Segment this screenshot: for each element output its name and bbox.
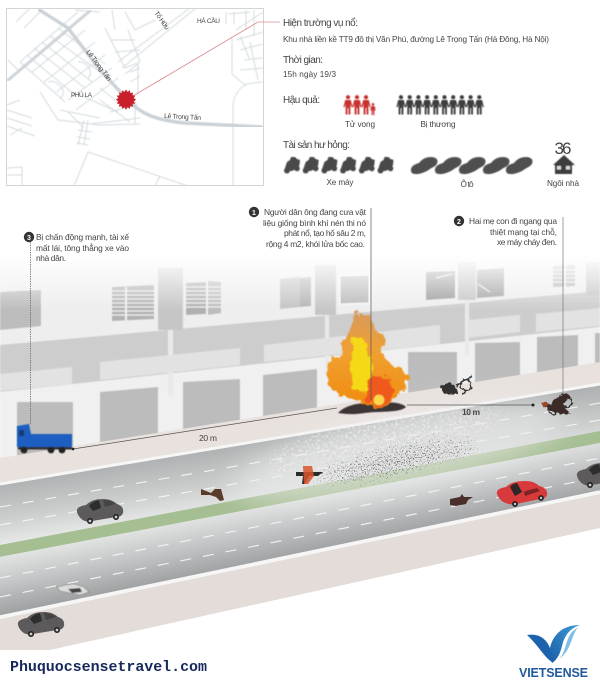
icon: house bbox=[553, 155, 575, 174]
upper windows bbox=[0, 290, 41, 330]
label: houses: Ngôi nhà bbox=[547, 179, 579, 188]
callout 3: 3 bbox=[27, 235, 31, 242]
icon group: cars bbox=[411, 157, 533, 174]
callout 3: Bị chấn động mạnh, tài xế bbox=[36, 232, 129, 242]
car: red sedan bbox=[497, 481, 547, 507]
icon group: deaths bbox=[343, 95, 376, 115]
car: dark sedan upper road bbox=[77, 499, 123, 524]
callout 3: mất lái, tông thẳng xe vào bbox=[36, 242, 129, 253]
callout 3: nhà dân. bbox=[36, 253, 66, 263]
callout 2 bbox=[454, 216, 557, 247]
dimension: 10 m: 10 m bbox=[462, 407, 480, 417]
icon group: motorbikes bbox=[284, 157, 394, 174]
callout 2: thiệt mạng tại chỗ, bbox=[490, 227, 557, 237]
upper road bbox=[0, 384, 600, 546]
victim: lower lanes bbox=[450, 494, 473, 506]
number: damaged houses: 36 bbox=[554, 139, 572, 158]
text: time detail: 15h ngày 19/3 bbox=[283, 70, 336, 79]
victim: near median bbox=[201, 489, 224, 501]
dimension: 20 m bbox=[72, 408, 337, 450]
callout 1: phát nổ, tạo hố sâu 2 m, bbox=[284, 228, 366, 238]
map labels: Tố Hữu bbox=[152, 9, 172, 32]
victim: burning bbox=[296, 466, 323, 484]
callout 2: 2 bbox=[457, 219, 461, 226]
map labels: Lê Trọng Tấn bbox=[84, 48, 114, 83]
map labels: Lê Trọng Tấn bbox=[164, 111, 202, 122]
buildings bbox=[0, 225, 600, 480]
heading: location: Hiện trường vụ nổ: bbox=[283, 17, 358, 29]
blast haze bbox=[226, 377, 574, 523]
car: dark sedan right edge bbox=[577, 463, 600, 488]
debris scatter bbox=[277, 394, 513, 511]
ground shutters bbox=[17, 333, 600, 460]
text: location detail: Khu nhà liền kề TT9 đô thị Văn Phú, đường Lê Trọng Tấn (Hà Đông, Hà Nội) bbox=[283, 35, 549, 44]
motorbike wreck on road bbox=[57, 584, 89, 595]
median strip bbox=[0, 431, 600, 557]
callout 2: xe máy cháy đen. bbox=[497, 237, 557, 247]
map line: location callout bbox=[133, 22, 280, 96]
shutter slats bbox=[112, 270, 575, 315]
balcony rails bbox=[0, 308, 600, 391]
callout 2: Hai mẹ con đi ngang qua bbox=[469, 216, 557, 226]
lower road bbox=[0, 443, 600, 617]
panel: incident facts bbox=[283, 17, 579, 189]
upper pavement bbox=[0, 362, 600, 484]
motorbike wreck near blast bbox=[440, 376, 472, 395]
dimension: 10 m bbox=[407, 404, 534, 417]
heading: damaged property: Tài sản hư hỏng: bbox=[283, 139, 350, 151]
callout 1: rộng 4 m2, khói lửa bốc cao. bbox=[266, 239, 365, 249]
crater bbox=[338, 402, 406, 414]
lane markings bbox=[0, 403, 600, 597]
lower pavement bbox=[0, 494, 600, 650]
label: deaths: Tử vong bbox=[345, 120, 375, 129]
callout 1: Người dân ông đang cưa vật bbox=[264, 207, 367, 217]
callout 1: 1 bbox=[252, 210, 256, 217]
panel: street scene bbox=[0, 208, 600, 650]
fire bbox=[327, 311, 407, 406]
label: injured: Bị thương bbox=[420, 120, 456, 129]
logo: Vietsense bbox=[519, 625, 588, 680]
leader line: callout 3 bbox=[30, 240, 32, 425]
truck bbox=[17, 424, 72, 453]
label: cars: Ô tô bbox=[460, 179, 474, 189]
panel: location map bbox=[6, 8, 280, 186]
icon group: injured bbox=[396, 95, 484, 114]
heading: consequences: Hậu quả: bbox=[283, 95, 320, 106]
label: motorbikes: Xe máy bbox=[326, 178, 354, 187]
columns bbox=[158, 262, 600, 330]
leader line: callout 1 bbox=[370, 208, 372, 400]
callout 1 bbox=[249, 207, 367, 249]
map labels: PHÚ LA bbox=[71, 90, 93, 99]
callout 1: liệu giống bình khí nén thi nó bbox=[263, 218, 366, 228]
leader line: callout 2 bbox=[562, 217, 564, 395]
icon: explosion marker on map bbox=[116, 90, 136, 110]
heading: time: Thời gian: bbox=[283, 55, 323, 66]
map labels: HÀ CẦU bbox=[197, 15, 220, 25]
logo: Vietsense: VIETSENSE bbox=[519, 666, 588, 680]
website watermark: Phuquocsensetravel.com bbox=[10, 659, 207, 676]
white debris scatter bbox=[229, 366, 541, 514]
callout 3 bbox=[24, 232, 129, 263]
car: dark sedan pavement bbox=[18, 612, 64, 637]
dimension: 20 m: 20 m bbox=[199, 433, 217, 443]
burnt motorbike and victims bbox=[541, 393, 572, 414]
map labels bbox=[71, 9, 220, 122]
